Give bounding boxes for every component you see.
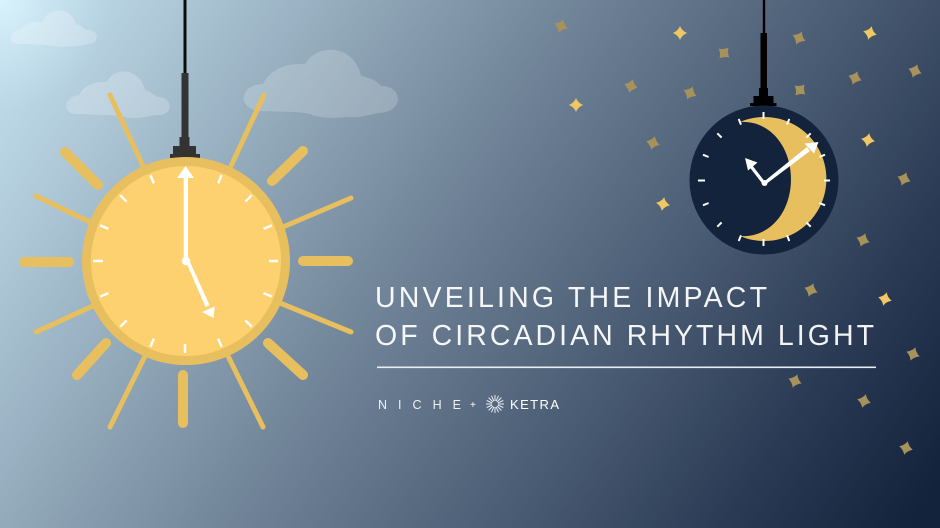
cloud: right bbox=[244, 50, 398, 118]
sun clock bbox=[24, 0, 351, 427]
title: UNVEILING THE IMPACT bbox=[375, 282, 767, 314]
moon clock bbox=[690, 0, 838, 254]
crescent moon bbox=[740, 117, 826, 241]
logos bbox=[378, 395, 559, 413]
dim stars bbox=[552, 17, 924, 457]
Ketra starburst icon bbox=[486, 395, 504, 413]
title bbox=[375, 282, 874, 352]
moon hanger bbox=[750, 0, 776, 106]
moon clock face bbox=[690, 106, 838, 254]
sun hanger bbox=[170, 0, 200, 158]
cloud: top left bbox=[11, 11, 97, 47]
NICHE logo: NICHE bbox=[378, 398, 461, 412]
sun clock hands bbox=[177, 166, 215, 318]
title: OF CIRCADIAN RHYTHM LIGHT bbox=[375, 320, 874, 352]
sun tick marks bbox=[93, 175, 278, 353]
plus sign: + bbox=[470, 400, 476, 411]
KETRA logo: KETRA bbox=[510, 397, 559, 412]
bright stars bbox=[569, 24, 894, 308]
cloud: middle bbox=[66, 72, 170, 118]
sun rays bbox=[24, 95, 351, 427]
stars bbox=[552, 17, 924, 457]
moon tick marks bbox=[698, 112, 830, 246]
sun clock face bbox=[86, 162, 286, 360]
divider line bbox=[377, 366, 876, 368]
moon clock hands bbox=[745, 142, 818, 186]
